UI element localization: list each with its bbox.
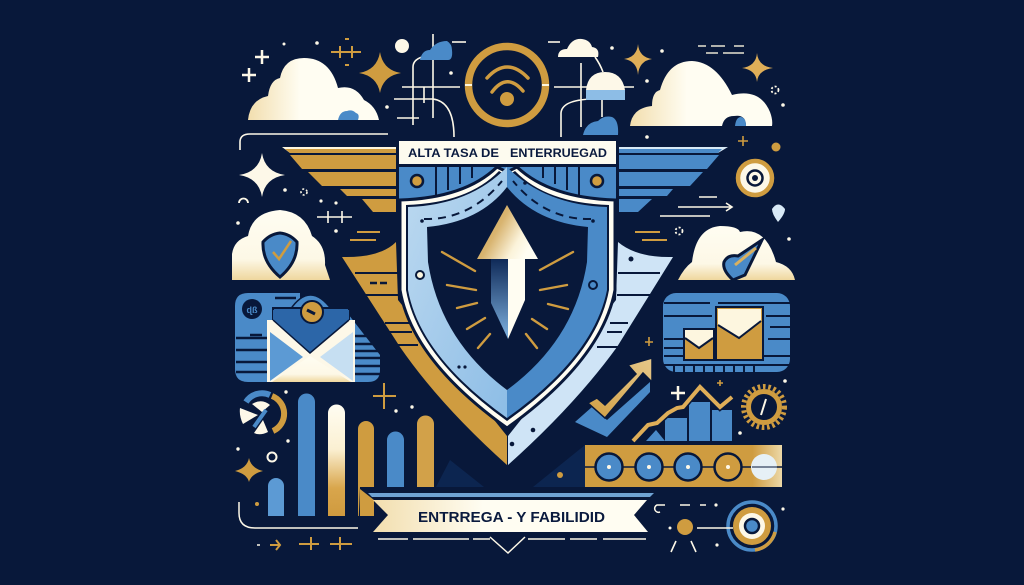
middle-left cloud with badge (232, 210, 330, 280)
lines and chevron below banner (378, 537, 646, 553)
top-right cloud (630, 61, 772, 126)
right email panel (663, 293, 790, 372)
line chart with bars (633, 387, 732, 441)
left email panel (235, 293, 381, 382)
right wing: blue stripes (619, 147, 728, 212)
target icon right (738, 161, 772, 195)
gold timeline strip (585, 445, 782, 487)
arrow rays (442, 252, 573, 348)
motion lines and drop (660, 197, 785, 222)
wifi ring icon (465, 46, 549, 124)
plus marks and dots (236, 39, 791, 241)
middle-right cloud with pin (678, 226, 795, 280)
bar chart (268, 394, 434, 516)
left email panel: ɖß (246, 305, 258, 315)
band behind banner with rivets (399, 167, 616, 201)
gear icon (744, 386, 784, 428)
pie icon (240, 393, 284, 434)
left wing: gold stripes (282, 147, 396, 212)
top banner: ENTERRUEGAD (510, 148, 607, 160)
bottom-right node ring (655, 502, 785, 552)
growth arrow (575, 358, 652, 437)
bottom ribbon banner (358, 487, 654, 535)
small blue cloud top-left (395, 39, 466, 60)
circuit lines top-left (394, 34, 460, 137)
sparkle stars (235, 44, 773, 482)
shield (400, 167, 615, 428)
top banner: ALTA TASA DE (408, 148, 499, 160)
upward arrow (477, 205, 538, 339)
text dashes top-right (698, 46, 744, 53)
top banner (399, 141, 616, 164)
shade behind lower panels (436, 445, 585, 487)
top-left cloud (240, 58, 388, 150)
circuit and small clouds top-right (548, 39, 634, 137)
small marks right (557, 337, 787, 478)
shield back: gold and light-blue wings (342, 242, 673, 465)
marks around bar chart (236, 383, 414, 550)
bottom ribbon banner: ENTRREGA - Y FABILIDID (418, 509, 605, 526)
